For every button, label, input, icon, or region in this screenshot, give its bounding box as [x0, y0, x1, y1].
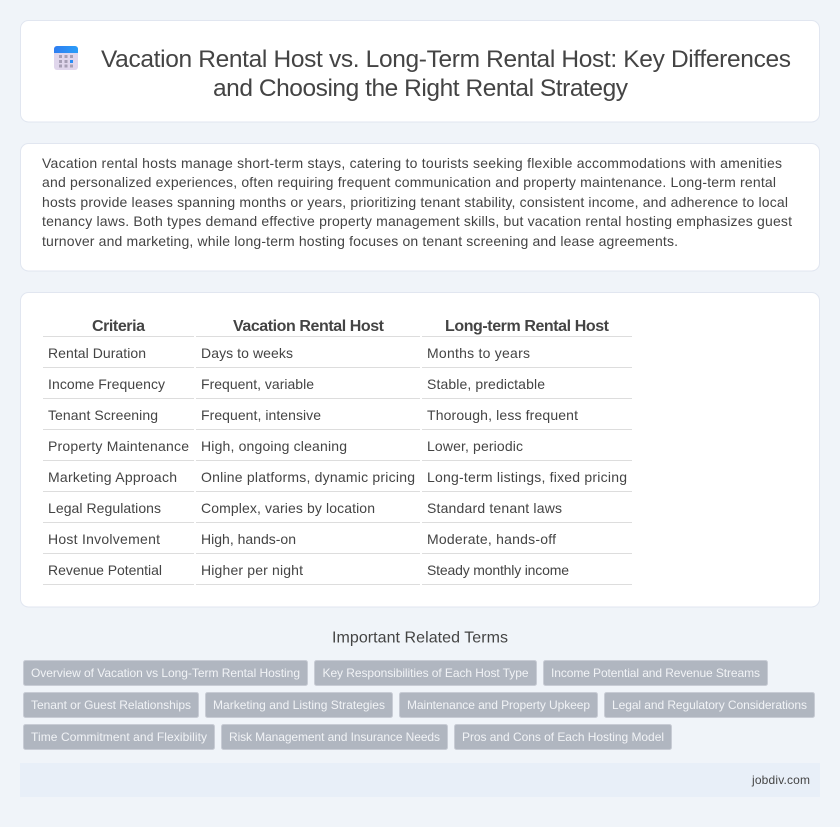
tag [544, 660, 768, 686]
row: host involvement [43, 531, 632, 554]
row: property maintenance: Lower, periodic [427, 438, 523, 454]
icon: calendar [54, 46, 78, 70]
tag: Risk Management and Insurance Needs [229, 730, 440, 744]
panel: description [20, 144, 820, 271]
table header: Long-term Rental Host [445, 318, 610, 335]
tag: Legal and Regulatory Considerations [612, 698, 807, 712]
row: rental duration: Months to years [427, 345, 530, 361]
text block: description: hosts provide leases spanning months or years, prioritizing tenant stability, consistent income, and adherence to local [42, 194, 788, 210]
row: income frequency: Frequent, variable [201, 376, 314, 392]
row: revenue potential: Steady monthly income [427, 562, 569, 578]
heading: important related terms: Important Related Terms [332, 630, 508, 646]
row: host involvement: Host Involvement [48, 531, 160, 547]
row: income frequency: Income Frequency [48, 376, 165, 392]
footer [20, 763, 820, 797]
tag: Income Potential and Revenue Streams [551, 666, 760, 680]
row: tenant screening: Thorough, less frequent [427, 407, 578, 423]
row: rental duration: Rental Duration [48, 345, 146, 361]
row: property maintenance [43, 438, 632, 460]
row: property maintenance: Property Maintenance [48, 438, 189, 454]
row: rental duration [43, 345, 632, 368]
text block: description [42, 155, 792, 249]
row: marketing approach: Online platforms, dynamic pricing [201, 469, 415, 485]
table header: Criteria [92, 318, 145, 335]
tag [604, 692, 814, 718]
tag [24, 692, 198, 718]
text block: description: tenancy laws. Both types demand effective property management skills, but vacation rental hosting emphasizes guest [42, 213, 792, 229]
row: property maintenance: High, ongoing cleaning [201, 438, 347, 454]
row: revenue potential: Revenue Potential [48, 562, 162, 578]
row: tenant screening [43, 407, 632, 430]
tag [24, 724, 214, 750]
row: host involvement: Moderate, hands-off [427, 531, 556, 547]
title: Vacation Rental Host vs. Long-Term Rental Host: Key Differences [101, 46, 791, 73]
title [101, 46, 791, 102]
footer: jobdiv.com [751, 773, 810, 787]
tag [222, 724, 448, 750]
tag [206, 692, 392, 718]
table header [43, 318, 632, 336]
panel: comparison table [20, 292, 820, 607]
row: income frequency: Stable, predictable [427, 376, 545, 392]
tag: Pros and Cons of Each Hosting Model [462, 730, 664, 744]
tag: Marketing and Listing Strategies [213, 698, 385, 712]
tag: Key Responsibilities of Each Host Type [322, 666, 529, 680]
text block: description: turnover and marketing, while long-term hosting focuses on tenant screening and lease agreements. [42, 233, 678, 249]
row: marketing approach: Marketing Approach [48, 469, 177, 485]
row: legal regulations [43, 500, 632, 522]
row: marketing approach: Long-term listings, fixed pricing [427, 469, 627, 485]
row: rental duration: Days to weeks [201, 345, 293, 361]
tag [454, 724, 672, 750]
text block: description: and personalized experiences, often requiring frequent communication and property maintenance. Long-term rental [42, 174, 776, 190]
row: legal regulations: Standard tenant laws [427, 500, 562, 516]
row: income frequency [43, 376, 632, 398]
row: host involvement: High, hands-on [201, 531, 296, 547]
tag: Maintenance and Property Upkeep [407, 698, 590, 712]
table header: Vacation Rental Host [233, 318, 385, 335]
row: revenue potential: Higher per night [201, 562, 303, 578]
text block: description: Vacation rental hosts manage short-term stays, catering to tourists seeking flexible accommodations with amenities [42, 155, 782, 171]
tag [400, 692, 598, 718]
tag: Time Commitment and Flexibility [31, 730, 207, 744]
row: legal regulations: Legal Regulations [48, 500, 161, 516]
tag: Tenant or Guest Relationships [31, 698, 191, 712]
panel: header [20, 20, 820, 122]
title: and Choosing the Right Rental Strategy [213, 75, 629, 102]
row: legal regulations: Complex, varies by location [201, 500, 375, 516]
row: tenant screening: Tenant Screening [48, 407, 158, 423]
tag: Overview of Vacation vs Long-Term Rental Hosting [31, 666, 300, 680]
tag [24, 660, 308, 686]
row: tenant screening: Frequent, intensive [201, 407, 321, 423]
tag [314, 660, 536, 686]
row: marketing approach [43, 469, 632, 492]
related term tags [24, 660, 814, 750]
row: revenue potential [43, 562, 632, 584]
